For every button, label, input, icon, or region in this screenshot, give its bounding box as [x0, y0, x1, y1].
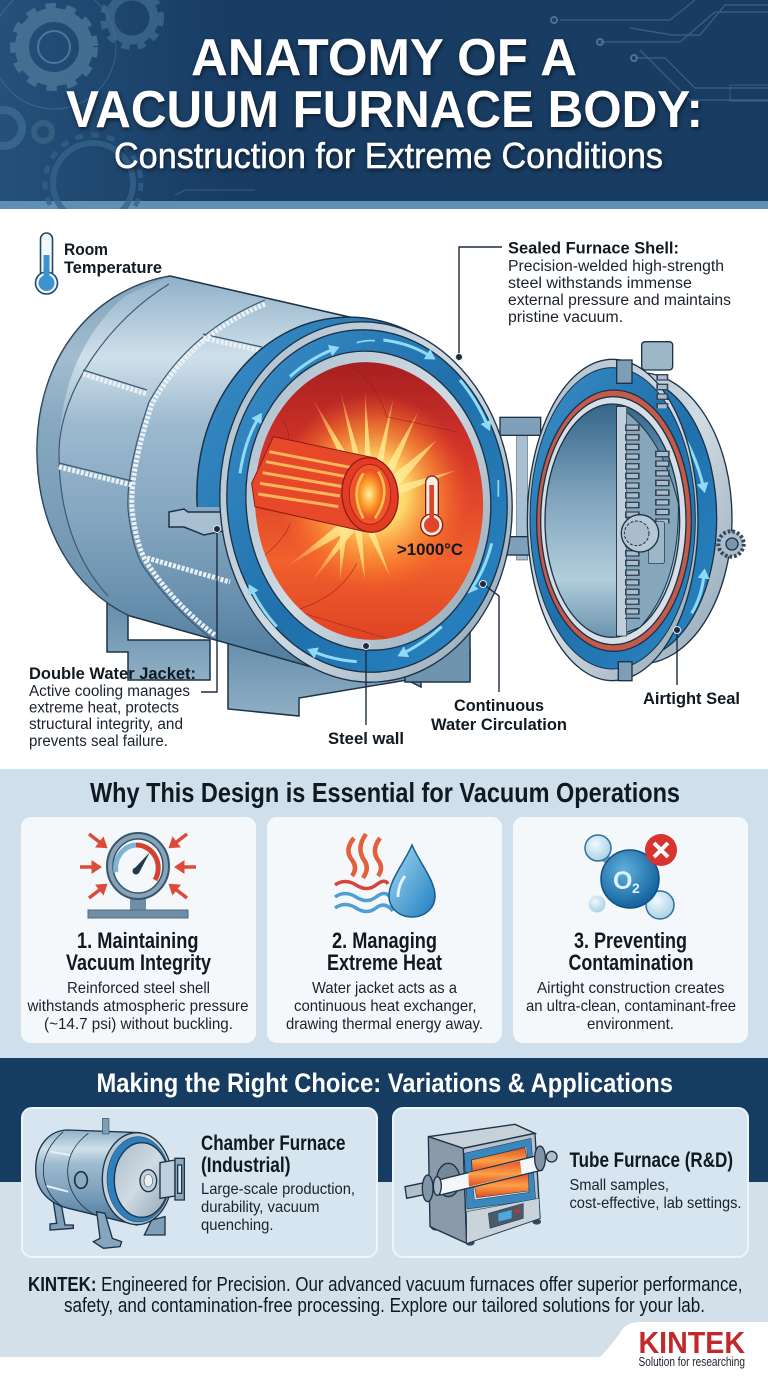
- card: vacuum integrity: (~14.7 psi) without buckling.: [44, 1016, 233, 1033]
- callout: continuous water circulation: Continuous: [454, 696, 544, 715]
- top and bottom door lugs: [617, 360, 632, 681]
- callout: sealed furnace shell: steel withstands immense: [508, 275, 692, 292]
- label: room temperature: Temperature: [64, 258, 162, 277]
- card: extreme heat: 2. Managing: [332, 928, 437, 953]
- icon: pressure gauge: [80, 833, 196, 918]
- card: contamination: Airtight construction creates: [537, 980, 724, 997]
- card: tube furnace: cost-effective, lab settings.: [570, 1195, 742, 1212]
- card: extreme heat: Extreme Heat: [327, 950, 443, 975]
- icon: room temperature thermometer: [36, 233, 58, 294]
- card: extreme heat: drawing thermal energy away.: [286, 1016, 483, 1033]
- glow rays: [287, 390, 457, 582]
- card: contamination: an ultra-clean, contaminant-free: [526, 998, 736, 1015]
- callout: continuous water circulation: Water Circulation: [431, 715, 567, 734]
- card: contamination: Contamination: [568, 950, 694, 975]
- callout: sealed furnace shell: Precision-welded high-strength: [508, 258, 724, 275]
- hot zone: [255, 362, 484, 640]
- callout: airtight seal: Airtight Seal: [643, 689, 740, 708]
- card: vacuum integrity: [21, 817, 256, 1043]
- callout: continuous water circulation: [431, 580, 567, 734]
- icon: tube furnace: [405, 1124, 557, 1246]
- card: vacuum integrity: Vacuum Integrity: [66, 950, 212, 975]
- clamp latch: [169, 509, 228, 535]
- door back flange: [548, 373, 732, 664]
- callout: steel wall: [328, 642, 404, 748]
- card: vacuum integrity: Reinforced steel shell: [67, 980, 210, 997]
- card: contamination: environment.: [587, 1016, 674, 1033]
- callout: double water jacket: extreme heat, protects: [29, 700, 179, 716]
- callout: double water jacket: [29, 526, 220, 750]
- body band lines: [59, 284, 265, 639]
- title: Construction for Extreme Conditions: [114, 135, 663, 176]
- label: room temperature: [64, 240, 162, 277]
- section heading: Making the Right Choice: Variations & Applications: [96, 1068, 673, 1098]
- water jacket ring: [215, 320, 519, 682]
- icon: chamber furnace: [36, 1118, 184, 1248]
- card: extreme heat: Water jacket acts as a: [312, 980, 457, 997]
- door interior and locking rack: [617, 406, 678, 636]
- furnace feet: [107, 591, 470, 716]
- title: ANATOMY OF A: [191, 29, 577, 87]
- callout: double water jacket: prevents seal failure.: [29, 733, 168, 750]
- hinge: [500, 417, 541, 560]
- callout: airtight seal: [643, 626, 740, 708]
- side gear: [718, 531, 744, 557]
- label: room temperature: Room: [64, 240, 108, 259]
- weld seams: [59, 304, 265, 636]
- card: tube furnace: Tube Furnace (R&D): [570, 1149, 733, 1172]
- title: [66, 29, 703, 176]
- background gears and circuit pattern: [0, 0, 768, 231]
- footer logo: KINTEK: [638, 1325, 746, 1360]
- card: chamber furnace: Chamber Furnace: [201, 1132, 346, 1155]
- outer steel ring: [208, 312, 524, 692]
- door front flange: [527, 359, 698, 681]
- furnace body shell: [37, 276, 380, 682]
- inner steel wall: [236, 343, 501, 658]
- card: vacuum integrity: 1. Maintaining: [77, 928, 198, 953]
- panel: variations and applications: [0, 1058, 768, 1357]
- title: VACUUM FURNACE BODY:: [66, 81, 703, 139]
- airtight seal ring: [537, 390, 691, 651]
- icon: hot thermometer: [421, 476, 443, 536]
- callout: double water jacket: Active cooling manages: [29, 683, 190, 700]
- furnace front face: [219, 321, 513, 683]
- callout: sealed furnace shell: [456, 238, 731, 360]
- callout: double water jacket: structural integrity, and: [29, 716, 183, 733]
- furnace door: [500, 342, 744, 681]
- callout: sealed furnace shell: pristine vacuum.: [508, 309, 623, 326]
- footer logo: [0, 1322, 768, 1376]
- outer water jacket band: [196, 316, 419, 507]
- card: chamber furnace: quenching.: [201, 1217, 274, 1234]
- callout: sealed furnace shell: external pressure and maintains: [508, 292, 731, 309]
- card: extreme heat: [267, 817, 502, 1043]
- callout: double water jacket: Double Water Jacket:: [29, 664, 196, 683]
- icon: oxygen molecule with cross: [585, 834, 677, 919]
- header banner: [0, 0, 768, 231]
- card: chamber furnace: Large-scale production,: [201, 1181, 355, 1198]
- card: contamination: 3. Preventing: [574, 928, 687, 953]
- card: chamber furnace: [22, 1108, 377, 1257]
- icon: heat waves and water drop: [335, 834, 435, 917]
- callout: steel wall: Steel wall: [328, 729, 404, 748]
- card: contamination: [513, 817, 748, 1043]
- label: over 1000 C: >1000°C: [397, 540, 463, 559]
- callout: sealed furnace shell: Sealed Furnace Shell:: [508, 238, 679, 258]
- main furnace diagram panel: [0, 209, 768, 769]
- water flow arrows: [677, 425, 703, 487]
- icon: oxygen molecule with cross: 2: [632, 880, 640, 896]
- card: chamber furnace: durability, vacuum: [201, 1199, 320, 1216]
- card: tube furnace: [393, 1108, 748, 1257]
- card: vacuum integrity: withstands atmospheric pressure: [27, 998, 249, 1015]
- closing statement: [28, 1274, 742, 1317]
- card: chamber furnace: (Industrial): [201, 1154, 290, 1177]
- panel: why this design: [0, 769, 768, 1058]
- card: extreme heat: continuous heat exchanger,: [294, 998, 476, 1015]
- card: tube furnace: Small samples,: [570, 1177, 669, 1194]
- icon: oxygen molecule with cross: O: [613, 867, 632, 895]
- heating element tube: [252, 437, 402, 535]
- circulation arrows: [240, 340, 498, 662]
